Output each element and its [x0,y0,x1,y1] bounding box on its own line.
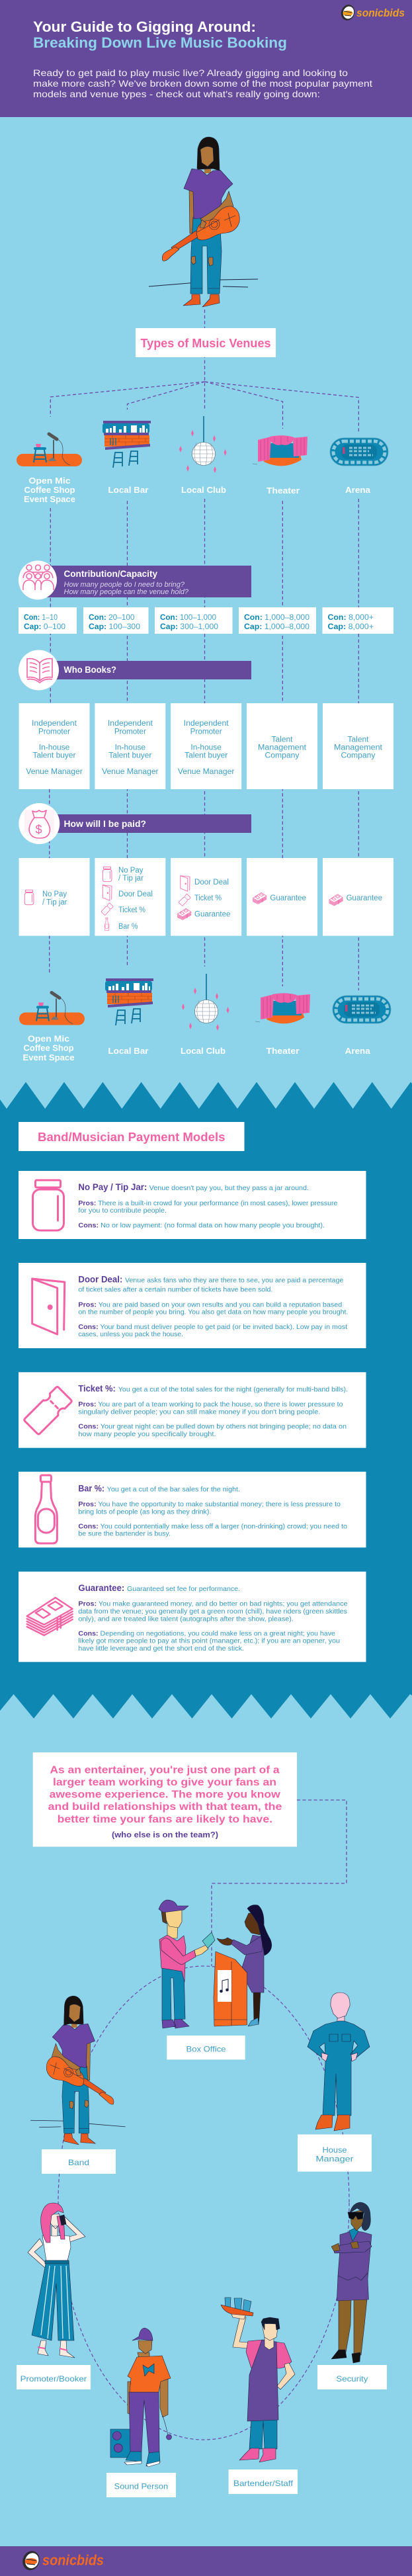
con/cap cards [19,607,393,634]
card: theater bookers [247,703,317,789]
footer bar [0,2546,412,2576]
banner: contribution capacity: How many people do I need to bring? [63,581,185,589]
text: door deal [78,1275,348,1338]
text: bar: Pros: You have the opportunity to make substantial money; there is less pressure to [78,1500,341,1508]
logo: sonicbids footer: sonicbids [42,2552,104,2569]
text: guarantee: only), and are treated like talent (autographs after the show, please). [78,1615,294,1623]
label: box office: Box Office [186,2044,226,2053]
label: band: Band [68,2158,89,2167]
card: local club payment [171,858,241,936]
illustration: bartender [221,2297,295,2462]
venue label: open mic: Open Mic [28,1034,69,1044]
text: no pay: Cons: No or low payment: (no formal data on how many people you brought). [78,1222,325,1230]
text: bar: be sure the bartender is busy. [78,1530,171,1538]
intro text [33,67,372,99]
card: local club payment: Door Deal [194,879,229,886]
text: door deal: Pros: You are paid based on your own results and you can build a reputation based [78,1301,342,1309]
who-books cards [19,703,393,789]
title: Your Guide to Gigging Around: [33,19,256,35]
card: local club bookers: Independent [184,720,229,728]
intro text: models and venue types - check out what's really going down: [33,89,320,99]
banner: who books [19,650,251,691]
label: house manager [298,2134,372,2172]
text: door deal: cases, unless you pack the house. [78,1330,183,1338]
card: local bar bookers: In-house [115,744,145,751]
card: open mic bookers: Promoter [38,728,70,736]
text: bar [78,1483,347,1538]
icon: jar [33,1180,63,1230]
text: bar: Bar %: [78,1483,104,1493]
icon: ticket [24,1386,72,1435]
venue label: open mic: Event Space [22,1052,74,1062]
banner: who books: Who Books? [63,664,116,675]
venue label: open mic: Coffee Shop [24,485,75,495]
label: sound person: Sound Person [114,2482,168,2491]
callout: team message: and build relationships with that team, the [48,1801,282,1813]
text: ticket: how many people you specifically brought. [78,1430,216,1438]
logo: sonicbids top [339,3,405,22]
card: arena numbers: Con: 8,000+ [328,613,374,622]
card: theater bookers: Company [265,751,300,759]
illustration: musician with guitar [149,137,258,307]
card: arena bookers: Talent [348,736,369,744]
flow lines: venue tree [50,310,358,990]
text: door deal: on the number of people you bring. You also get data on how many people you brought. [78,1309,348,1316]
card: local bar payment: No Pay [118,867,144,875]
panel: bar % [19,1472,366,1547]
venue label: arena: Arena [345,485,371,495]
illustration: box office [159,1900,272,2028]
icon: bottle [35,1475,57,1543]
callout: team message [33,1752,297,1847]
card: local bar payment [95,858,165,936]
label: house manager: House [323,2145,347,2155]
card: open mic bookers: Venue Manager [26,768,83,776]
heading: band musician payment models: Band/Musician Payment Models [38,1131,225,1144]
label: bartender staff: Bartender/Staff [233,2479,294,2488]
tray with glasses [221,2297,253,2316]
card: theater numbers [239,607,316,634]
card: local club numbers: Cap: 300–1,000 [160,622,218,631]
card: open mic payment: No Pay [42,890,67,898]
card: theater numbers: Con: 1,000–8,000 [244,613,309,622]
venue icon: local club [182,974,229,1031]
illustration: promoter booker [28,2203,85,2358]
venue icon: theater [255,993,310,1023]
banner: contribution capacity [19,561,251,599]
banner: how will I be paid: How will I be paid? [63,818,146,829]
text: door deal: Venue asks fans who they are there to see, you are paid a percentage [125,1277,343,1285]
figure: box office attendant [217,1905,272,2026]
card: arena bookers: Management [334,744,383,751]
text: ticket: Ticket %: [78,1383,116,1393]
text: ticket: You get a cut of the total sales for the night (generally for multi-band bills). [118,1385,348,1393]
text: ticket: Pros: You are part of a team working to pack the house, so there is lower pressure to [78,1400,343,1408]
text: no pay: No Pay / Tip Jar: [78,1182,147,1192]
card: theater numbers: Cap: 1,000–8,000 [244,622,309,631]
card: open mic numbers: Cap: 0–100 [24,622,65,631]
icon: money bag: $ [36,823,42,836]
card: local club numbers: Con: 100–1,000 [160,613,216,622]
venue label: local club: Local Club [181,1046,226,1056]
text: guarantee: have little leverage and get the short end of the stick. [78,1645,244,1653]
callout: team message: larger team working to give your fans an [53,1777,276,1788]
card: arena numbers: Cap: 8,000+ [328,622,374,631]
card: open mic bookers: Talent buyer [33,751,76,759]
speaker [110,2429,132,2458]
banner: how will I be paid [19,803,251,844]
team ring: dashed connectors [58,1800,349,2440]
panel: guarantee [19,1572,366,1662]
intro text: make more cash? We've broken down some of the most popular payment [33,78,372,89]
venue icon: arena [330,438,388,466]
text: ticket: singularly deliver people; you can still make money if you don't bring people. [78,1408,320,1416]
card: local bar bookers [95,703,165,789]
label: bartender staff [229,2469,298,2494]
label: sound person [106,2473,176,2497]
venue label: open mic: Coffee Shop [24,1043,74,1053]
text: no pay: for you to contribute people. [78,1207,167,1215]
venue label: arena: Arena [345,1046,370,1056]
callout: team message: better time your fans are likely to have. [58,1814,272,1825]
venue label: theater: Theater [267,486,300,495]
card: arena numbers [323,607,393,634]
icon: money bag [24,810,54,838]
card: theater bookers: Talent [271,736,293,744]
text: bar: You get a cut of the bar sales for the night. [107,1485,240,1493]
text: guarantee: Guarantee: [78,1583,124,1593]
card: theater payment [247,858,317,936]
venue label: local bar: Local Bar [108,1046,148,1056]
card: local bar payment: / Tip jar [118,875,144,882]
banner: contribution capacity: Contribution/Capacity [63,568,157,579]
label: promoter booker [17,2365,91,2389]
card: local bar bookers: Venue Manager [102,768,159,776]
panel: ticket % [19,1372,366,1448]
card: local bar numbers: Cap: 100–300 [89,622,140,631]
text: door deal: Cons: Your band must deliver people to get paid (or be invited back). Low pay in most [78,1323,347,1331]
card: local club payment: Ticket % [194,894,222,902]
card: local club bookers [171,703,241,789]
icon: door [32,1279,65,1334]
card: arena bookers [323,703,393,789]
payment cards [19,858,393,936]
venue label: open mic: Open Mic [29,476,70,486]
card: open mic numbers [19,607,77,634]
panel: door deal [19,1263,366,1348]
text: door deal: Door Deal: [78,1275,122,1285]
teal section background with zigzag edges [0,1082,412,1719]
venue label: open mic: Event Space [24,494,75,504]
title [33,19,287,51]
label: security: Security [336,2374,368,2383]
text: bar: bring lots of people (as long as they drink). [78,1508,211,1516]
header panel [0,0,412,117]
text: door deal: of ticket sales after a certain number of tickets have been sold. [78,1286,272,1294]
card: arena payment [323,858,393,936]
text: ticket: Cons: Your great night can be pulled down by others not bringing people; no data on [78,1423,347,1431]
text: guarantee: data from the venue; you generally get a green room (chill), have riders (green skittles [78,1608,347,1615]
card: open mic bookers: Independent [32,720,77,728]
venue label: open mic [24,476,75,504]
logo: sonicbids top: sonicbids [356,7,405,19]
venue icon: open mic [17,434,82,466]
venue label: theater: Theater [266,1046,299,1056]
venue icon: theater [253,435,308,466]
card: local bar numbers: Con: 20–100 [89,613,135,622]
icon: money stack [27,1598,73,1635]
label: promoter booker: Promoter/Booker [21,2374,87,2383]
text: bar: Cons: You could pontentially make less off a larger (non-drinking) crowd; you need to [78,1523,347,1531]
card: open mic payment [19,858,90,936]
card: local club bookers: Venue Manager [178,768,235,776]
card: local bar payment: Bar % [118,923,138,931]
text: guarantee: Guaranteed set fee for performance. [127,1585,240,1593]
podium [214,1952,247,2026]
panel: no pay / tip jar [19,1171,366,1239]
heading: Types of Music Venues [136,328,276,357]
logo: sonicbids footer [20,2549,104,2573]
card: local club bookers: In-house [190,744,222,751]
card: local bar payment: Ticket % [118,906,145,914]
card: arena bookers: Company [341,751,376,759]
card: local club numbers [155,607,233,634]
illustration: sound person [110,2328,172,2467]
venue icon: local bar [105,978,153,1025]
heading: band musician payment models [19,1122,245,1151]
card: local club payment: Guarantee [194,910,230,918]
card: local bar numbers [83,607,148,634]
intro text: Ready to get paid to play music live? Already gigging and looking to [33,67,348,78]
venue label: local club: Local Club [181,485,226,495]
venue label: open mic [22,1034,74,1062]
label: house manager: Manager [316,2155,353,2164]
card: theater bookers: Management [258,744,307,751]
icon: open book [27,659,52,683]
card: open mic payment: / Tip jar [42,898,67,906]
card: open mic bookers [19,703,90,789]
text: guarantee [78,1583,348,1653]
card: local club bookers: Promoter [190,728,222,736]
text: ticket [78,1383,348,1438]
label: security [317,2365,387,2389]
venue icon: local club [179,416,226,473]
text: guarantee: Pros: You make guaranteed money, and do better on bad nights; you get attendance [78,1600,348,1608]
card: local club bookers: Talent buyer [185,751,227,759]
text: guarantee: Cons: Depending on negotiations, you could make less on a great night; you have [78,1630,335,1638]
card: local bar bookers: Independent [108,720,153,728]
venue row repeated: icons and labels [19,974,391,1062]
venue icon: open mic [19,992,85,1025]
card: theater payment: Guarantee [270,894,306,902]
text: no pay [78,1182,338,1230]
card: local bar payment: Door Deal [118,890,153,898]
illustration: house manager [308,1993,370,2131]
illustration: security [331,2202,372,2363]
callout: team message: (who else is on the team?) [112,1830,218,1840]
callout: team message: awesome experience. The more you know [50,1789,281,1801]
label: box office [167,2036,245,2059]
text: guarantee: likely got more people to pay at this point (manager, etc.); if you are an opener, you [78,1637,340,1645]
card: local bar bookers: Promoter [114,728,146,736]
card: local bar bookers: Talent buyer [108,751,152,759]
card: open mic numbers: Con: 1–10 [24,613,58,622]
venue row: icons and labels [17,416,388,504]
illustration: band member [30,1996,126,2145]
banner: contribution capacity: How many people can the venue hold? [63,588,189,596]
card: arena payment: Guarantee [347,894,382,902]
text: no pay: Venue doesn't pay you, but they pass a jar around. [149,1184,309,1192]
label: band [42,2149,116,2174]
figure: customer [159,1900,215,2028]
callout: team message: As an entertainer, you're just one part of a [50,1764,280,1776]
heading: Types of Music Venues: Types of Music Venues [140,337,271,350]
text: no pay: Pros: There is a built-in crowd for your performance (in most cases), lower pressure [78,1199,338,1207]
title: Breaking Down Live Music Booking [33,34,287,51]
venue icon: arena [333,996,391,1023]
icon: crowd [23,565,54,590]
venue icon: local bar [103,421,151,468]
venue label: local bar: Local Bar [108,485,148,495]
card: open mic bookers: In-house [39,744,69,751]
